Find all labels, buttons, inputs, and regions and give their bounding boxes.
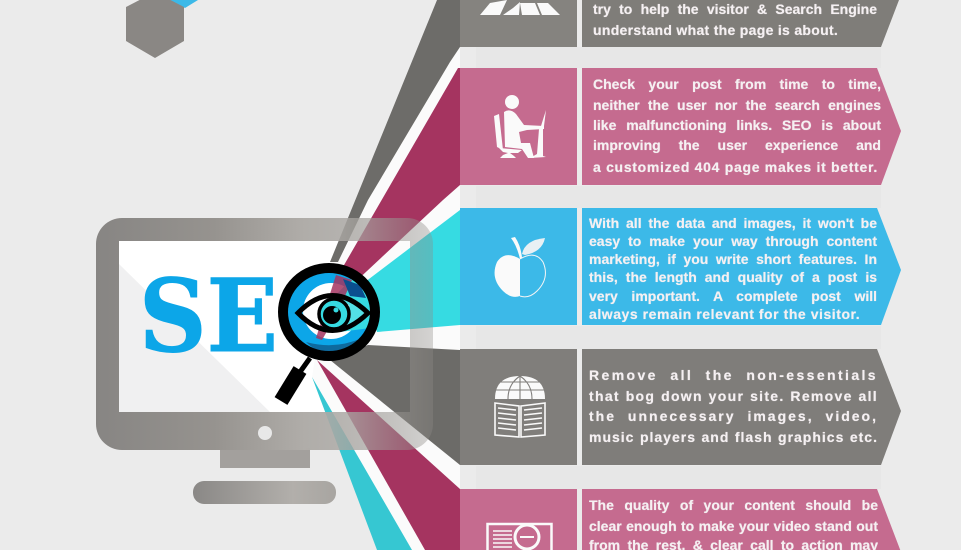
icon: document with magnifier [488, 524, 552, 550]
text block row 0 [592, 1, 877, 38]
icon: person at desk [494, 95, 546, 158]
text block row 4: The quality of your content should be [589, 497, 878, 513]
text block row 2: easy to make your way through content [589, 233, 877, 249]
background row shadows [476, 47, 881, 489]
text block row 2: marketing, if you write short features. In [589, 251, 877, 267]
white ray backing [312, 0, 460, 550]
text block row 1: like malfunctioning links. SEO is about [593, 117, 881, 133]
text arrow row 4 [582, 489, 901, 550]
ray: gray middle [330, 345, 460, 465]
text block row 2 [588, 215, 878, 322]
text block row 1: improving the user experience and [593, 137, 881, 153]
ray: gray top [330, 0, 460, 262]
text block row 0: understand what the page is about. [593, 22, 838, 38]
text block row 3: Remove all the non-essentials [589, 367, 878, 383]
ray: cyan middle [365, 210, 460, 332]
hexagon decoration [126, 0, 198, 58]
text block row 1: neither the user nor the search engines [593, 97, 881, 113]
text arrow row 1 [582, 68, 901, 185]
icon box row 0 [460, 0, 577, 47]
monitor screen [119, 241, 410, 412]
text arrow row 0 [582, 0, 899, 47]
text block row 3: the unnecessary images, video, [589, 408, 878, 424]
monitor power button [258, 426, 272, 440]
text block row 3: that bog down your site. Remove all [589, 388, 878, 404]
text block row 1: Check your post from time to time, [593, 76, 881, 92]
text block row 1: a customized 404 page makes it better. [593, 159, 878, 175]
icon box row 1 [460, 68, 577, 185]
text arrow row 2 [582, 208, 901, 325]
ray: crimson top [340, 68, 460, 285]
text block row 2: this, the length and quality of a post is [589, 269, 877, 285]
text block row 2: always remain relevant for the visitor. [589, 306, 860, 322]
text block row 2: With all the data and images, it won't be [589, 215, 877, 231]
text block row 1 [593, 76, 882, 176]
text block row 2: very important. A complete post will [589, 288, 877, 304]
icon: map [480, 0, 560, 15]
text block row 4 [589, 497, 878, 550]
text block row 0: try to help the visitor & Search Engine [593, 1, 877, 17]
ray: cyan bottom [312, 377, 412, 550]
monitor stand and base [193, 448, 336, 504]
icon: apple [495, 237, 545, 297]
icon box row 3 [460, 349, 577, 465]
icon: globe and book [495, 376, 545, 437]
text block row 3 [588, 367, 878, 446]
magnifier with eye [281, 268, 375, 401]
icon box row 2 [460, 208, 577, 325]
icon box row 4 [460, 489, 577, 550]
text block row 4: clear enough to make your video stand out [589, 518, 878, 534]
monitor frame [96, 218, 433, 450]
text arrow row 3 [582, 349, 901, 465]
SEO letters: SE [139, 257, 278, 375]
text block row 3: music players and flash graphics etc. [589, 429, 878, 445]
ray: crimson bottom [317, 360, 460, 550]
